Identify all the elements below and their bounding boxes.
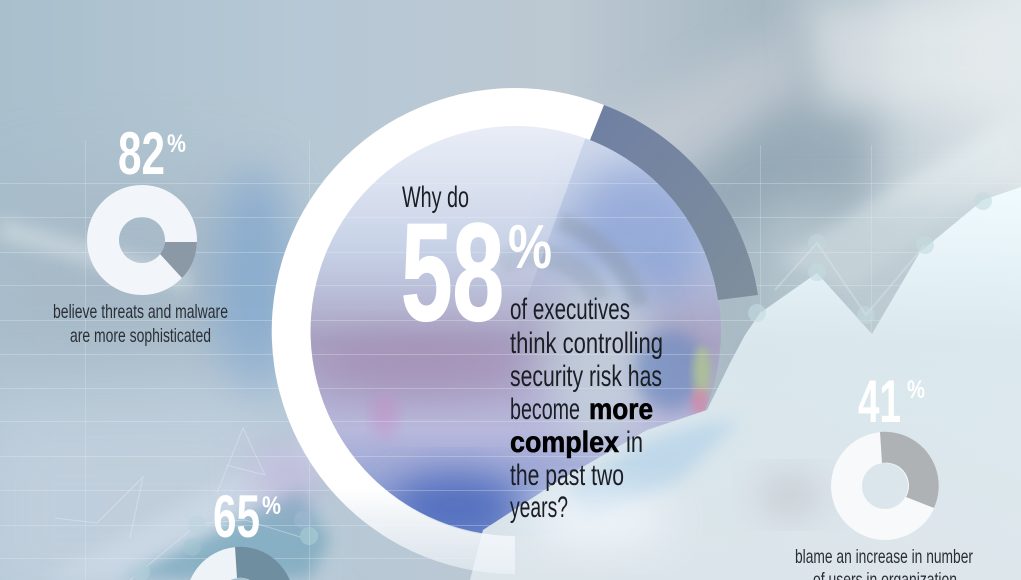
caption: [53, 301, 228, 347]
figure 82%: %: [167, 130, 186, 158]
vertical grid: [86, 140, 872, 580]
question body: the past two: [510, 459, 624, 492]
area chart: pale mountain shape: [470, 187, 1021, 580]
main ring: remaining dark arc: [590, 105, 758, 300]
lead-in: why do: Why do: [402, 181, 469, 214]
stat: 65%: [186, 483, 294, 580]
question body: security risk has: [510, 360, 662, 393]
circle: inner panel with abstract backdrop: [305, 120, 725, 550]
figure 65%: 65: [213, 483, 260, 550]
stat: 41% increase in users: [795, 368, 973, 580]
donut chart 41%: [831, 432, 939, 540]
caption: are more sophisticated: [70, 325, 211, 347]
caption: believe threats and malware: [53, 301, 228, 323]
question body: [510, 293, 663, 524]
stat: 82% threats and malware: [53, 120, 228, 347]
chart lines behind the donuts, lower left: [55, 428, 318, 580]
donut chart 82%: [87, 185, 197, 295]
figure 41%: 41: [858, 368, 901, 435]
question body: years?: [510, 491, 568, 524]
question body: in: [626, 426, 643, 459]
donut chart 65%: [186, 547, 294, 580]
question body: become: [510, 393, 580, 426]
main ring: 58% white arc: [272, 88, 604, 574]
figure 65%: %: [262, 492, 281, 520]
question body: of executives: [510, 293, 630, 326]
question body: complex: [510, 426, 619, 459]
question body: more: [589, 393, 653, 426]
question body: think controlling: [510, 327, 663, 360]
figure 82%: 82: [118, 120, 165, 187]
main question text: [401, 181, 663, 524]
percent sign: %: [508, 213, 552, 282]
caption: [795, 546, 973, 580]
big number 58: 58: [401, 195, 504, 350]
horizontal grid: [0, 184, 1021, 558]
figure 41%: %: [907, 376, 925, 404]
